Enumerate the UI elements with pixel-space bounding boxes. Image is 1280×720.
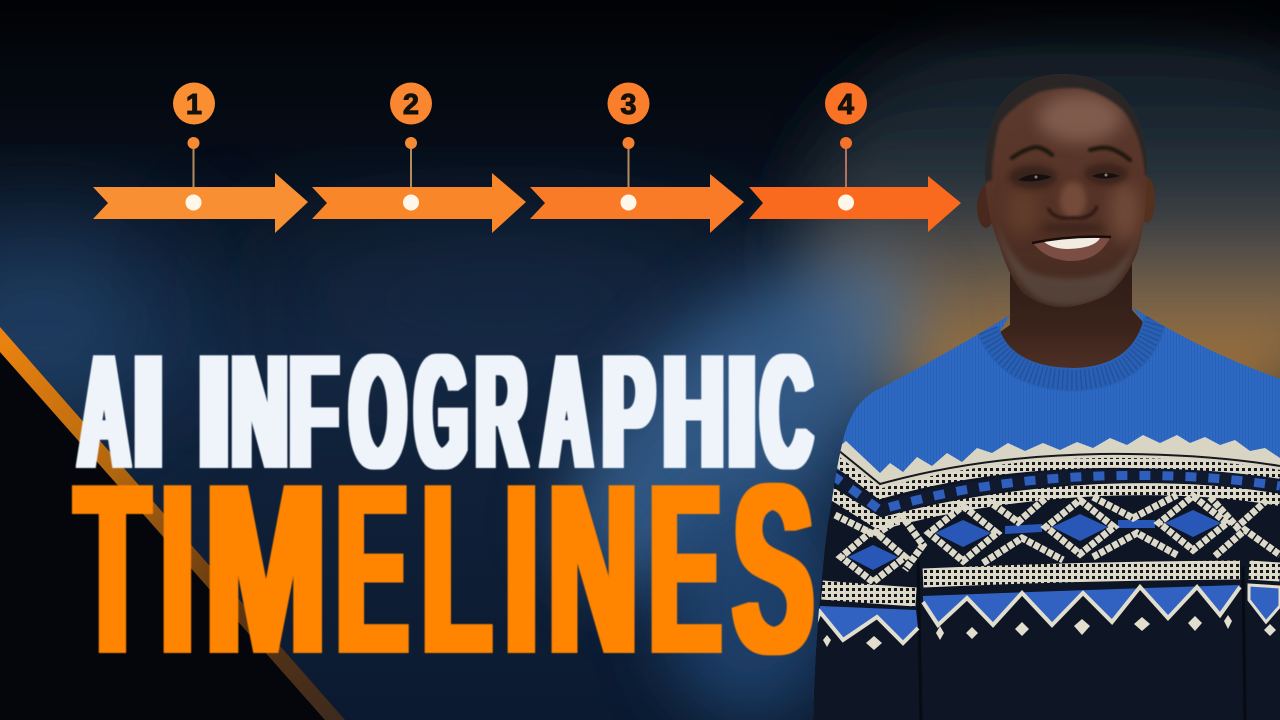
title: line one: A (542, 322, 591, 502)
right sleeve check band (1249, 570, 1280, 572)
title (76, 322, 813, 704)
nose (1048, 182, 1097, 218)
title: line one: H (663, 322, 724, 502)
stripe bands (838, 450, 1280, 484)
title: line two: E (650, 435, 721, 704)
stubble (1000, 235, 1134, 306)
title: line one: N (232, 322, 288, 502)
snowflake dots (823, 615, 1276, 650)
title: line one: I (132, 322, 165, 502)
title: line one: O (350, 322, 406, 502)
neck (1000, 260, 1143, 372)
right sleeve triangles (1249, 585, 1280, 622)
mouth and smile (1032, 237, 1111, 261)
arrow 2 with marker: 2 (403, 89, 419, 121)
title: line one: R (476, 322, 526, 502)
title: line two: M (205, 435, 327, 704)
eyebrows (1012, 147, 1130, 160)
arrow 4 with marker: 4 (838, 89, 854, 121)
body blue triangles (923, 585, 1240, 625)
title: line one: F (290, 322, 338, 502)
body check band (923, 570, 1240, 578)
arrow 3 with marker (530, 82, 744, 233)
diagonal orange stripe (0, 327, 345, 720)
body cream zigzag (923, 587, 1240, 625)
text: S (733, 435, 813, 704)
title: line two: E (336, 435, 408, 704)
timeline: four numbered arrows (93, 82, 961, 233)
head (985, 74, 1147, 307)
presenter portrait (800, 70, 1280, 720)
left sleeve check band (822, 590, 916, 597)
title: line two: T (76, 435, 149, 704)
ears (977, 177, 1155, 228)
inner blue diamonds (848, 510, 1221, 570)
eyes (1018, 173, 1120, 181)
title: line one: G (415, 322, 467, 502)
title: line two: I (160, 435, 194, 704)
title: line two: N (548, 435, 638, 704)
title: line two: L (422, 435, 491, 704)
sleeve seams (918, 560, 921, 720)
diamond motifs (835, 495, 1280, 582)
navy lower body (800, 458, 1280, 720)
title: line two: I (504, 435, 538, 704)
arrow 3 with marker: 3 (620, 89, 637, 121)
arrow 1 with marker (93, 82, 308, 233)
arrow 1 with marker: 1 (186, 89, 202, 121)
arrow 4 with marker (749, 82, 961, 232)
title: line one: I (196, 322, 232, 502)
collar (988, 318, 1156, 380)
title: line one: I (726, 322, 758, 502)
left sleeve triangles (820, 606, 918, 643)
title: line one: P (603, 322, 654, 502)
title: line one: A (79, 322, 129, 502)
cream zigzag yoke edge (835, 435, 1280, 492)
text: C (761, 322, 812, 502)
sweater (800, 300, 1280, 720)
left sleeve zigzag (816, 612, 918, 643)
hair (985, 74, 1147, 184)
arrow 2 with marker (312, 82, 526, 233)
